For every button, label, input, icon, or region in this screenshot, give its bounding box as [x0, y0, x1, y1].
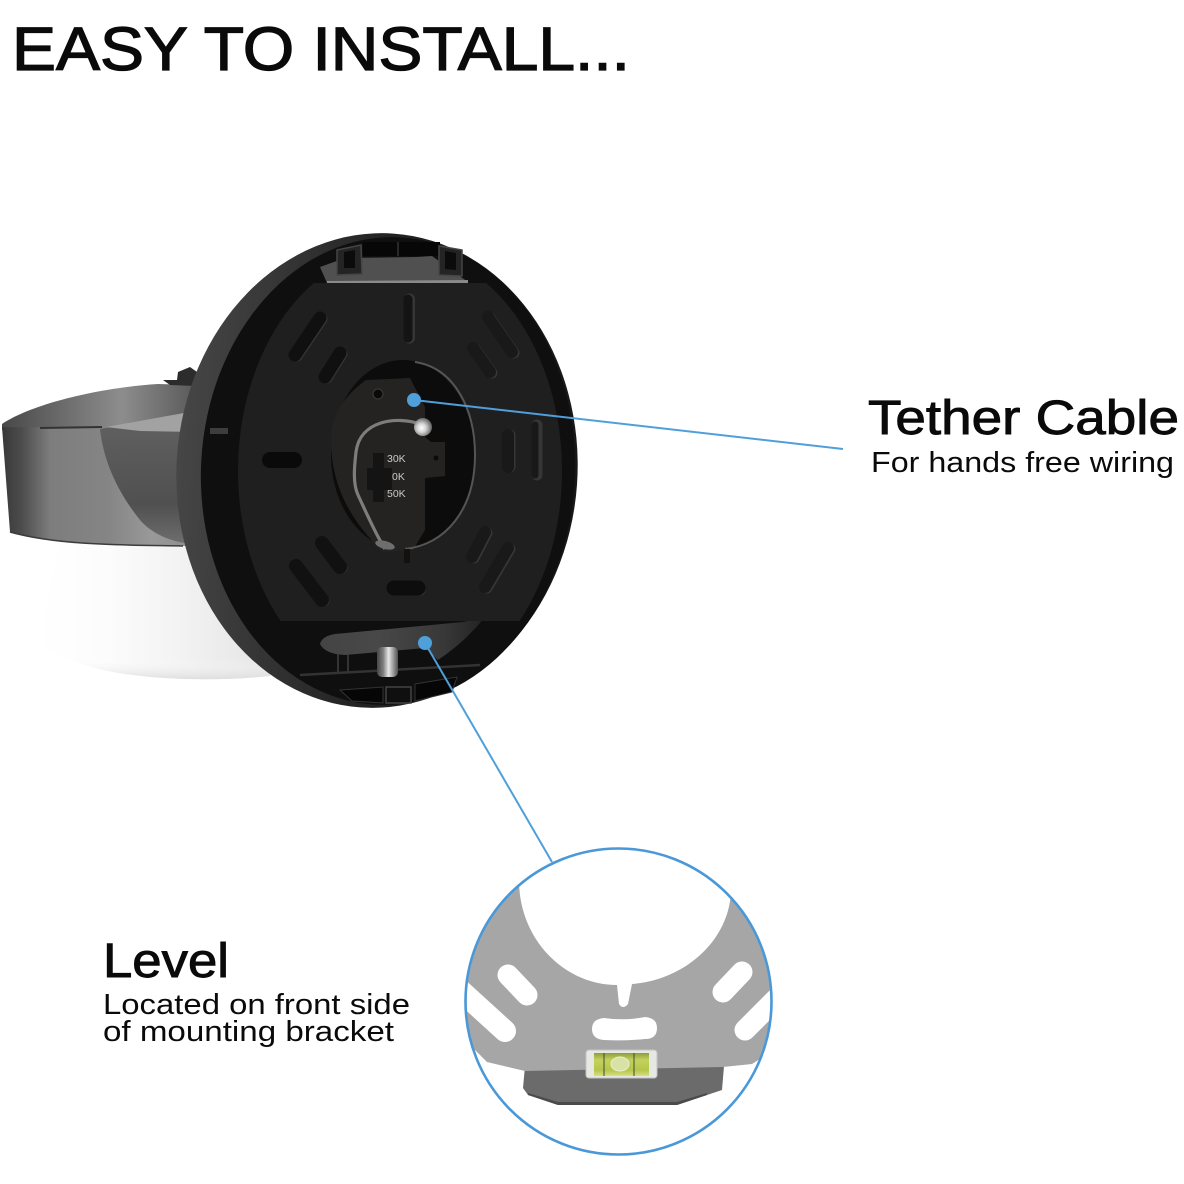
- text: level description: of mounting bracket: [103, 1016, 394, 1048]
- lower right slots: [472, 532, 508, 587]
- switch labels: 30K: [387, 453, 406, 465]
- callout: tether cable leader: [407, 393, 843, 449]
- disc inner recess: [189, 228, 587, 714]
- text: level description: [103, 989, 410, 1048]
- upper right slots: [473, 317, 512, 372]
- bracket centre slot: [592, 1017, 657, 1040]
- cable terminal: [414, 418, 432, 436]
- bubble level vial: [586, 1050, 657, 1078]
- slot edge highlights: [271, 299, 537, 601]
- black plate with slots: [238, 283, 562, 621]
- switch labels: 0K: [392, 471, 405, 483]
- inset circle outline: [466, 848, 772, 1154]
- right vertical slots: [502, 435, 514, 467]
- top knob behind plate: [163, 367, 197, 386]
- disc outer rim: [160, 220, 594, 721]
- upper left slots: [295, 318, 340, 377]
- dark fixture hood: [2, 384, 195, 546]
- heading: Level: Level: [103, 935, 229, 988]
- product illustration: light fixture and mounting plate: [2, 220, 594, 721]
- heading: Tether Cable: Tether Cable: [868, 392, 1179, 445]
- bottom frame and level arm: [300, 617, 485, 703]
- inset: mounting bracket close-up: [450, 848, 790, 1154]
- callout: level leader: [418, 636, 552, 862]
- level vial pin: [377, 647, 398, 677]
- title: EASY TO INSTALL...: [12, 15, 630, 83]
- white light globe: [37, 542, 270, 679]
- pixelated label block: [367, 453, 392, 502]
- bracket slots: [460, 972, 780, 1031]
- switch labels: [387, 453, 406, 500]
- lower left slots: [296, 543, 340, 600]
- mounting disc: [176, 233, 578, 708]
- left horizontal slot: [270, 452, 294, 468]
- cable clip: [374, 539, 396, 551]
- top keyhole slot: [404, 299, 412, 338]
- centre opening: [331, 360, 475, 563]
- text: level description: Located on front side: [103, 989, 410, 1021]
- side notch: [210, 428, 228, 434]
- bottom centre slot: [394, 580, 418, 596]
- top clip assembly: [320, 242, 468, 285]
- switch labels: 50K: [387, 488, 406, 500]
- bracket flange: [523, 1066, 724, 1105]
- tether cable: [354, 420, 420, 549]
- bracket plate: [467, 886, 770, 1071]
- text: tether description: For hands free wiring: [871, 447, 1174, 479]
